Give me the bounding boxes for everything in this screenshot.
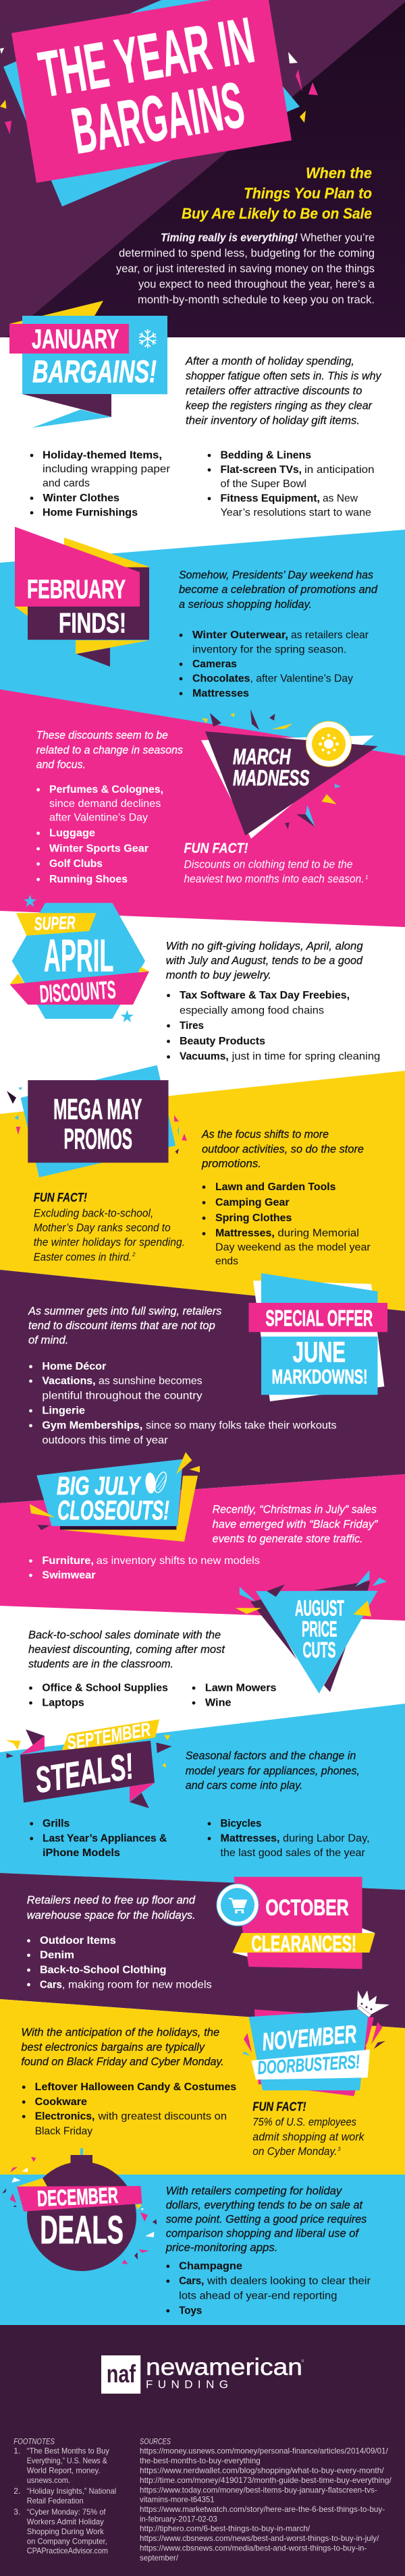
June list: plentiful throughout the country (42, 1390, 202, 1401)
March background (0, 690, 405, 927)
December intro: price-monitoring apps. (165, 2241, 277, 2253)
May fun fact: FUN FACT! (34, 1191, 87, 1204)
December heading (36, 2183, 124, 2252)
January list: Bedding & Linens (220, 449, 311, 461)
February badge (15, 527, 149, 667)
October list: Outdoor Items (40, 1935, 116, 1947)
March fun fact: heaviest two months into each season. (184, 872, 364, 885)
March heading (233, 744, 310, 790)
subtitle: Things You Plan to (244, 185, 372, 202)
April list: just in time for spring cleaning (232, 1051, 380, 1063)
November intro: found on Black Friday and Cyber Monday. (21, 2055, 224, 2068)
November fun fact: 75% of U.S. employees (252, 2116, 356, 2129)
October list: Cars (40, 1979, 62, 1990)
June list: since so many folks take their workouts (146, 1420, 337, 1432)
June background (0, 1270, 405, 1503)
confetti (0, 48, 318, 134)
sources: http://time.com/money/4190173/month-guide-best-time-buy-everything/ (140, 2475, 392, 2485)
February heading (27, 576, 126, 639)
sources: https://www.nerdwallet.com/blog/shopping/what-to-buy-every-month/ (140, 2466, 384, 2475)
May intro: As the focus shifts to more (201, 1128, 329, 1141)
footnotes: Retail Federation (27, 2496, 84, 2505)
icon: stars (24, 895, 134, 1022)
October list: , making room for new models (62, 1979, 212, 1990)
October intro: Retailers need to free up floor and (27, 1894, 196, 1907)
footnotes: CPAPracticeAdvisor.com (27, 2546, 108, 2556)
sources: https://www.today.com/money/best-items-buy-january-flatscreen-tvs- (140, 2485, 377, 2494)
footnotes: World Report, money. (27, 2466, 100, 2475)
November list (22, 2081, 236, 2137)
icon: surfboards (144, 1471, 169, 1494)
sources: https://www.cbsnews.com/news/best-and-worst-things-to-buy-in-july/ (140, 2533, 379, 2543)
February list: Mattresses (192, 688, 249, 700)
footnotes: Shopping During Work (27, 2527, 105, 2536)
May list: Lawn and Garden Tools (215, 1181, 336, 1193)
footnotes: “Holiday Insights,” National (27, 2486, 116, 2496)
July list: Swimwear (42, 1570, 96, 1581)
confetti (236, 1570, 387, 1617)
November intro (21, 2025, 224, 2068)
February list: Chocolates (192, 673, 250, 685)
footnotes: 2. (14, 2486, 20, 2496)
September heading: STEALS! (32, 1746, 136, 1801)
sources: vitamins-more-t64351 (140, 2495, 215, 2504)
May intro: promotions. (201, 1157, 261, 1170)
January list: Year’s resolutions start to wane (220, 507, 371, 519)
June list: Home Décor (42, 1361, 106, 1372)
sources: in-february-2017-02-03 (140, 2514, 217, 2523)
March list: Running Shoes (49, 874, 128, 885)
November list: Cookware (35, 2096, 87, 2108)
July intro: have emerged with “Black Friday” (213, 1517, 379, 1530)
footnotes (14, 2436, 116, 2556)
March intro (36, 729, 183, 771)
September intro (186, 1749, 360, 1792)
December intro (165, 2184, 367, 2253)
November fun fact (252, 2100, 365, 2158)
December list: Toys (179, 2305, 202, 2316)
intro text: you expect to need throughout the year, here’s a (138, 278, 375, 291)
November list: with greatest discounts on (97, 2111, 227, 2123)
January heading: JANUARY (32, 325, 119, 354)
intro text: determined to spend less, budgeting for the coming (119, 247, 375, 260)
September list: Last Year’s Appliances & (43, 1832, 167, 1844)
August intro: students are in the classroom. (28, 1658, 173, 1671)
icon: snowflake (139, 329, 157, 348)
August heading: AUGUST (295, 1596, 344, 1620)
December ornament badge (2, 2148, 157, 2271)
November background (0, 1999, 405, 2175)
December intro: dollars, everything tends to be on sale at (166, 2198, 363, 2211)
November fun fact: on Cyber Monday. (252, 2145, 337, 2158)
panel: footer (0, 2325, 405, 2576)
November fun fact: 3 (338, 2146, 341, 2152)
July list: as inventory shifts to new models (97, 1555, 260, 1567)
confetti (202, 709, 341, 829)
logo (101, 2354, 304, 2394)
May list: Mattresses, (215, 1228, 275, 1239)
December background (0, 2175, 405, 2325)
August badge (236, 1570, 387, 1693)
February list: , after Valentine’s Day (250, 673, 353, 685)
March intro: and focus. (36, 758, 86, 771)
intro text: year, or just interested in saving money on the things (116, 262, 375, 275)
May list: Spring Clothes (215, 1212, 292, 1224)
June heading: JUNE (293, 1337, 346, 1368)
January intro (185, 355, 382, 426)
April list: especially among food chains (180, 1005, 324, 1016)
footnotes: Workers Admit Holiday (27, 2517, 104, 2526)
August intro (28, 1628, 225, 1671)
panel: November (0, 1990, 405, 2175)
September list: the last good sales of the year (220, 1847, 365, 1859)
February heading: FINDS! (59, 607, 126, 639)
November list: Leftover Halloween Candy & Costumes (35, 2081, 236, 2093)
December list: Champagne (179, 2261, 242, 2272)
cyan card (3, 0, 300, 206)
January list: Flat-screen TVs, (220, 464, 302, 476)
sources: SOURCES (140, 2436, 171, 2446)
June intro: tend to discount items that are not top (28, 1319, 215, 1332)
title (34, 4, 259, 168)
June list: as sunshine becomes (99, 1376, 202, 1387)
May fun fact: 2 (132, 1252, 136, 1258)
March list: Golf Clubs (49, 858, 103, 870)
logo: naf (107, 2360, 136, 2388)
September heading (32, 1718, 153, 1801)
panel: December (0, 2148, 405, 2325)
December intro: some point. Getting a good price requires (166, 2212, 367, 2225)
April list: Tires (180, 1020, 204, 1032)
panel: March (0, 690, 405, 927)
April badge (9, 895, 149, 1022)
January list: and cards (43, 478, 90, 489)
June heading (265, 1306, 373, 1389)
April intro (166, 939, 363, 982)
July intro: events to generate store traffic. (213, 1532, 363, 1545)
March list: Winter Sports Gear (49, 843, 148, 854)
January list: Home Furnishings (43, 507, 138, 519)
January list: as New (323, 493, 358, 505)
March list: Luggage (49, 827, 95, 839)
September list: Mattresses, (220, 1832, 279, 1844)
January list: in anticipation (304, 464, 374, 476)
January list: including wrapping paper (43, 464, 171, 475)
sources: http://tiphero.com/6-best-things-to-buy-in-march/ (140, 2524, 310, 2533)
January intro: shopper fatigue often sets in. This is why (186, 370, 382, 383)
December list: Cars, (179, 2276, 204, 2287)
September heading: SEPTEMBER (65, 1718, 153, 1754)
May intro (201, 1128, 364, 1170)
November fun fact: admit shopping at work (252, 2130, 365, 2143)
October list (28, 1935, 212, 1990)
panel: January (9, 301, 382, 519)
March heading: MARCH (233, 744, 291, 768)
February list: as retailers clear (291, 629, 369, 641)
panel: May (0, 1065, 405, 1311)
March intro: related to a change in seasons (36, 744, 183, 756)
August list: Laptops (42, 1698, 84, 1709)
July background (0, 1474, 405, 1621)
June list (30, 1361, 337, 1446)
May fun fact (34, 1191, 185, 1264)
April list (167, 990, 380, 1063)
March fun fact: 1 (365, 874, 368, 880)
March badge (201, 709, 378, 839)
panel: February (0, 527, 405, 756)
July intro (213, 1503, 379, 1545)
February intro: Somehow, Presidents’ Day weekend has (179, 568, 373, 581)
March heading: MADNESS (233, 766, 310, 790)
February intro: become a celebration of promotions and (179, 583, 378, 596)
April list: Vacuums, (180, 1051, 229, 1063)
footnotes: 3. (14, 2507, 20, 2517)
panel: September (0, 1704, 405, 1890)
September intro: and cars come into play. (186, 1779, 302, 1792)
May heading (53, 1093, 142, 1155)
September badge (5, 1718, 172, 1808)
August intro: Back-to-school sales dominate with the (28, 1628, 221, 1641)
April list: Tax Software & Tax Day Freebies, (180, 990, 350, 1001)
intro text (116, 231, 375, 306)
October list: Back-to-School Clothing (40, 1965, 166, 1976)
panel: August (28, 1570, 387, 1709)
September intro: Seasonal factors and the change in (186, 1749, 356, 1762)
December intro: With retailers competing for holiday (166, 2184, 343, 2197)
August list: Wine (205, 1698, 232, 1709)
footnotes: usnews.com. (27, 2475, 70, 2485)
footnotes: Everything,” U.S. News & (27, 2456, 107, 2465)
sources: september/ (140, 2553, 179, 2563)
confetti (5, 1735, 172, 1768)
panel: July (0, 1452, 405, 1621)
icon: crown (357, 1990, 389, 2017)
logo: FUNDING (146, 2378, 228, 2390)
March list: since demand declines (49, 798, 161, 810)
February heading: FEBRUARY (27, 576, 126, 605)
September background (0, 1704, 405, 1890)
March fun fact (184, 841, 368, 885)
January heading: BARGAINS! (32, 354, 157, 389)
sources: the-best-months-to-buy-everything (140, 2456, 261, 2465)
November intro: With the anticipation of the holidays, the (21, 2025, 219, 2038)
June list: Lingerie (42, 1405, 85, 1417)
October heading (251, 1895, 356, 1956)
July list (30, 1555, 260, 1581)
confetti (7, 1088, 187, 1154)
January list: of the Super Bowl (220, 478, 306, 490)
December heading: DECEMBER (36, 2183, 119, 2211)
February background (0, 530, 405, 756)
April list: Beauty Products (180, 1036, 265, 1047)
March fun fact: FUN FACT! (184, 841, 248, 856)
March list: after Valentine’s Day (49, 812, 148, 824)
footer background (0, 2325, 405, 2576)
June badge (248, 1273, 387, 1401)
July heading (57, 1472, 169, 1525)
panel: October (0, 1873, 405, 2028)
October list: Denim (40, 1950, 74, 1961)
December list: lots ahead of year-end reporting (179, 2291, 337, 2302)
subtitle: Buy Are Likely to Be on Sale (182, 205, 372, 222)
footnotes: “Cyber Monday: 75% of (27, 2507, 106, 2517)
footnotes: 1. (14, 2446, 20, 2456)
February list: Cameras (192, 659, 237, 670)
intro text: month-by-month schedule to keep you on track. (138, 293, 375, 306)
pink title card (11, 0, 292, 183)
May list: Camping Gear (215, 1197, 290, 1208)
August list: Office & School Supplies (42, 1683, 168, 1694)
intro text: Whether you’re (300, 231, 375, 244)
header background (0, 0, 405, 344)
June intro (28, 1304, 222, 1347)
February intro (179, 568, 378, 611)
April intro: month to buy jewelry. (166, 969, 271, 982)
May list: ends (215, 1256, 238, 1267)
sources: https://money.usnews.com/money/personal-finance/articles/2014/09/01/ (140, 2446, 388, 2456)
November list: Black Friday (35, 2125, 92, 2137)
May list: during Memorial (277, 1228, 359, 1239)
June list: Vacations, (42, 1376, 96, 1387)
January badge (9, 301, 167, 428)
March list: Perfumes & Colognes, (49, 784, 163, 795)
July heading: CLOSEOUTS! (57, 1496, 169, 1525)
July badge (30, 1452, 200, 1542)
November heading: NOVEMBER (261, 2020, 358, 2056)
June list: outdoors this time of year (42, 1434, 168, 1446)
October intro (27, 1894, 196, 1922)
panel: header (0, 0, 405, 344)
January intro: their inventory of holiday gift items. (186, 414, 360, 426)
July list: Furniture, (42, 1555, 94, 1567)
June intro: of mind. (28, 1334, 68, 1347)
May fun fact: Mother’s Day ranks second to (34, 1221, 171, 1234)
October intro: warehouse space for the holidays. (27, 1909, 196, 1922)
September list: iPhone Models (43, 1847, 120, 1859)
November list: Electronics, (35, 2111, 94, 2123)
April intro: With no gift-giving holidays, April, along (166, 939, 363, 952)
February list (180, 629, 369, 700)
September list (30, 1818, 370, 1859)
sources: https://www.marketwatch.com/story/here-are-the-6-best-things-to-buy- (140, 2504, 385, 2514)
panel: June (0, 1270, 405, 1503)
November heading (256, 2020, 360, 2078)
April intro: with July and August, tends to be a good (166, 954, 363, 967)
October heading: OCTOBER (265, 1895, 349, 1920)
May badge (7, 1065, 187, 1177)
intro text: Timing really is everything! (161, 231, 298, 244)
July intro: Recently, “Christmas in July” sales (213, 1503, 377, 1516)
icon: shopping cart (217, 1884, 259, 1926)
December intro: comparison shopping and liberal use of (166, 2227, 360, 2239)
January intro: keep the registers ringing as they clear (186, 399, 373, 412)
September intro: model years for appliances, phones, (186, 1764, 360, 1777)
August heading (295, 1596, 344, 1662)
August intro: heaviest discounting, coming after most (28, 1643, 225, 1656)
September list: during Labor Day, (283, 1832, 370, 1844)
December heading: DEALS (40, 2208, 124, 2252)
May heading: PROMOS (63, 1123, 132, 1155)
November badge (242, 1990, 389, 2096)
June list: Gym Memberships, (42, 1420, 142, 1432)
February list: Winter Outerwear, (192, 629, 288, 641)
March intro: These discounts seem to be (36, 729, 168, 741)
footnotes: “The Best Months to Buy (27, 2446, 109, 2456)
December list: with dealers looking to clear their (207, 2276, 371, 2287)
January list: Holiday-themed Items, (43, 449, 162, 461)
September list: Grills (43, 1818, 70, 1829)
sources: https://www.cbsnews.com/media/best-and-worst-things-to-buy-in- (140, 2543, 367, 2552)
January list: Winter Clothes (43, 493, 119, 504)
December list (167, 2261, 371, 2316)
January intro: After a month of holiday spending, (185, 355, 354, 368)
January intro: retailers offer attractive discounts to (186, 384, 362, 397)
October badge (217, 1877, 375, 1969)
logo: newamerican (146, 2354, 302, 2380)
sources (140, 2436, 392, 2563)
confetti (242, 2022, 385, 2056)
panel: April (9, 895, 380, 1063)
April heading: SUPER (34, 912, 76, 934)
July heading: BIG JULY (57, 1472, 142, 1501)
May background (0, 1071, 405, 1311)
April heading: DISCOUNTS (38, 976, 117, 1008)
May list: Day weekend as the model year (215, 1242, 371, 1254)
May fun fact: Excluding back-to-school, (34, 1206, 153, 1219)
March list (37, 784, 163, 885)
May fun fact: Easter comes in third. (34, 1251, 132, 1264)
February intro: a serious shopping holiday. (179, 598, 312, 611)
footnotes: on Company Computer, (27, 2536, 107, 2546)
February list: inventory for the spring season. (192, 644, 347, 655)
April heading (34, 912, 117, 1008)
subtitle (182, 165, 372, 222)
icon: sun (306, 721, 351, 766)
August list: Lawn Mowers (205, 1683, 277, 1694)
January heading (32, 325, 157, 389)
subtitle: When the (306, 165, 372, 181)
May intro: outdoor activities, so do the store (202, 1142, 364, 1155)
August heading: CUTS (302, 1638, 336, 1662)
August list (30, 1683, 277, 1709)
August heading: PRICE (302, 1617, 337, 1642)
May heading: MEGA MAY (53, 1093, 142, 1125)
May list (202, 1181, 371, 1267)
March fun fact: Discounts on clothing tend to be the (184, 858, 352, 871)
June intro: As summer gets into full swing, retailers (28, 1304, 222, 1317)
confetti (2, 2157, 157, 2264)
November intro: best electronics bargains are typically (21, 2040, 205, 2053)
November fun fact: FUN FACT! (252, 2100, 306, 2113)
January list: Fitness Equipment, (220, 493, 320, 505)
September list: Bicycles (220, 1818, 261, 1829)
January list (30, 449, 374, 519)
October background (0, 1873, 405, 2028)
footnotes: FOOTNOTES (14, 2436, 55, 2446)
April heading: APRIL (44, 930, 113, 981)
May fun fact: the winter holidays for spending. (34, 1236, 185, 1249)
